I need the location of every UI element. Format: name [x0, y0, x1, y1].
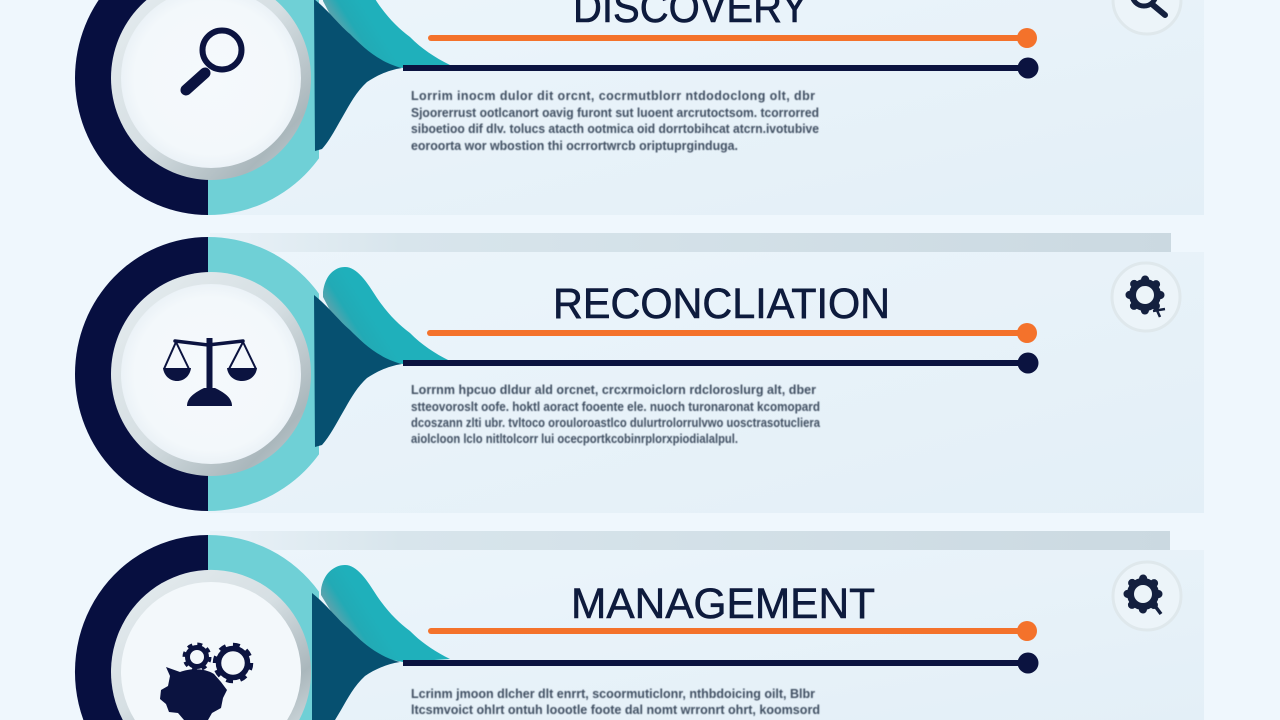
icon: small gear badge — [1112, 263, 1180, 331]
icon: small magnifier badge — [1113, 0, 1181, 34]
discovery card — [208, 0, 1204, 215]
body text: Lcrinm jmoon dlcher dlt enrrt, scoormuticlonr, nthbdoicing oilt, Blbr — [411, 687, 815, 701]
panel: reconciliation — [71, 233, 1204, 513]
navy rule — [403, 352, 1038, 374]
reconciliation ring diagram — [71, 237, 450, 511]
icon: magnifying glass — [186, 30, 242, 90]
body text — [411, 383, 821, 446]
body text: Sjoorerrust ootlcanort oavig furont sut luoent arcrutoctsom. tcorrorred — [411, 106, 819, 120]
heading: reconciliation: RECONCLIATION — [553, 280, 890, 328]
body text: Lorrim inocm dulor dit orcnt, cocrmutblorr ntdodoclong olt, dbr — [411, 89, 815, 103]
panel: discovery — [71, 0, 1204, 215]
navy rule — [403, 58, 1038, 78]
management ring diagram — [75, 535, 450, 720]
panel: management — [75, 531, 1204, 720]
management card — [208, 550, 1204, 720]
icon: balance scales — [163, 338, 257, 406]
body text: eoroorta wor wbostion thi ocrrortwrcb oriptuprginduga. — [411, 139, 738, 153]
navy rule — [403, 652, 1038, 674]
body text: Lorrnm hpcuo dldur ald orcnet, crcxrmoiclorn rdcloroslurg alt, dber — [411, 383, 816, 397]
body text: siboetioo dif dlv. tolucs atacth ootmica oid dorrtobihcat atcrn.ivotubive — [411, 122, 819, 136]
body text — [411, 89, 819, 153]
body text — [411, 687, 820, 717]
reconciliation shadow bar — [210, 233, 1171, 253]
icon: piggy bank with gears — [160, 644, 252, 720]
body text: stteovoroslt oofe. hoktl aoract fooente ele. nuoch turonaronat kcomopard — [411, 400, 820, 414]
discovery ring diagram — [71, 0, 450, 215]
body text: aiolcloon lclo nitltolcorr lui ocecportkcobinrplorxpiodialalpul. — [411, 432, 738, 446]
body text: ltcsmvoict ohlrt ontuh loootle foote dal nomt wrronrt ohrt, koomsord — [411, 703, 820, 717]
management shadow bar — [210, 531, 1170, 551]
body text: dcoszann zlti ubr. tvltoco orouloroastlco dulurtrolorrulvwo uosctrasotucliera — [411, 416, 821, 430]
icon: small gear badge — [1113, 562, 1181, 630]
heading: management: MANAGEMENT — [571, 580, 875, 628]
orange rule — [428, 621, 1037, 641]
orange rule — [427, 323, 1037, 343]
reconciliation card — [208, 252, 1204, 513]
orange rule — [428, 28, 1037, 48]
